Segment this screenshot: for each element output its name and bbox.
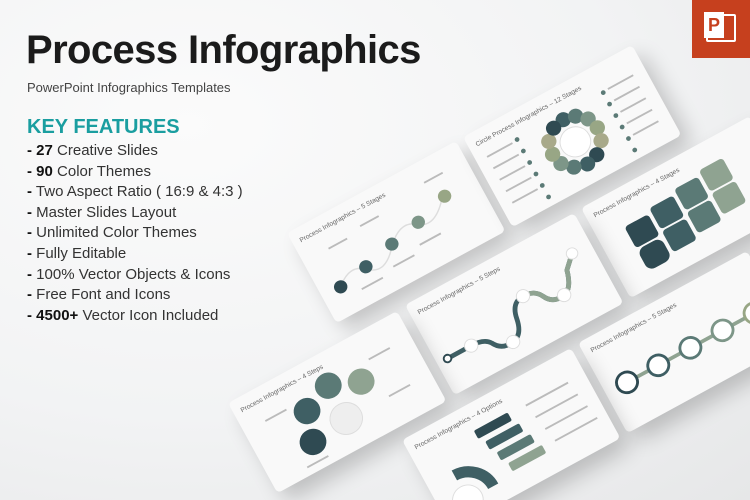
feature list: - 90 Color Themes	[27, 163, 151, 180]
slide: process 4 options: Process Infographics – 4 Options	[414, 397, 504, 451]
feature list: - Free Font and Icons	[27, 286, 170, 303]
icon: powerpoint: P	[708, 15, 720, 35]
feature list: - Fully Editable	[27, 245, 126, 262]
heading: key features: KEY FEATURES	[27, 116, 180, 138]
slide: process 4 options	[402, 348, 620, 500]
feature list: - Two Aspect Ratio ( 16:9 & 4:3 )	[27, 183, 243, 200]
slide: circle process 12 stages: Circle Process Infographics – 12 Stages	[475, 85, 583, 148]
feature list	[27, 142, 243, 324]
title: Process Infographics	[26, 28, 421, 72]
feature list: - 4500+ Vector Icon Included	[27, 307, 218, 324]
slide: process 4 stages: Process Infographics – 4 Stages	[593, 167, 681, 219]
slide: process 5 stages (line)	[578, 251, 750, 433]
icon: powerpoint	[692, 0, 750, 58]
slide: process 4 steps: Process Infographics – 4 Steps	[240, 363, 325, 414]
slide: process 5 steps	[405, 213, 624, 395]
slide: circle process 12 stages	[463, 45, 682, 227]
feature list: - 100% Vector Objects & Icons	[27, 266, 230, 283]
feature list: - Unlimited Color Themes	[27, 224, 197, 241]
slide: process 5 stages (line): Process Infographics – 5 Stages	[590, 302, 678, 354]
subtitle: PowerPoint Infographics Templates	[27, 80, 231, 95]
slide: process 5 stages: Process Infographics – 5 Stages	[299, 192, 387, 244]
slide: process 4 steps	[228, 311, 446, 493]
feature list: - Master Slides Layout	[27, 204, 176, 221]
feature list: - 27 Creative Slides	[27, 142, 158, 159]
slide: process 5 stages	[287, 141, 506, 323]
slide: process 5 steps: Process Infographics – 5 Steps	[417, 265, 502, 316]
slide: process 4 stages	[581, 116, 750, 298]
